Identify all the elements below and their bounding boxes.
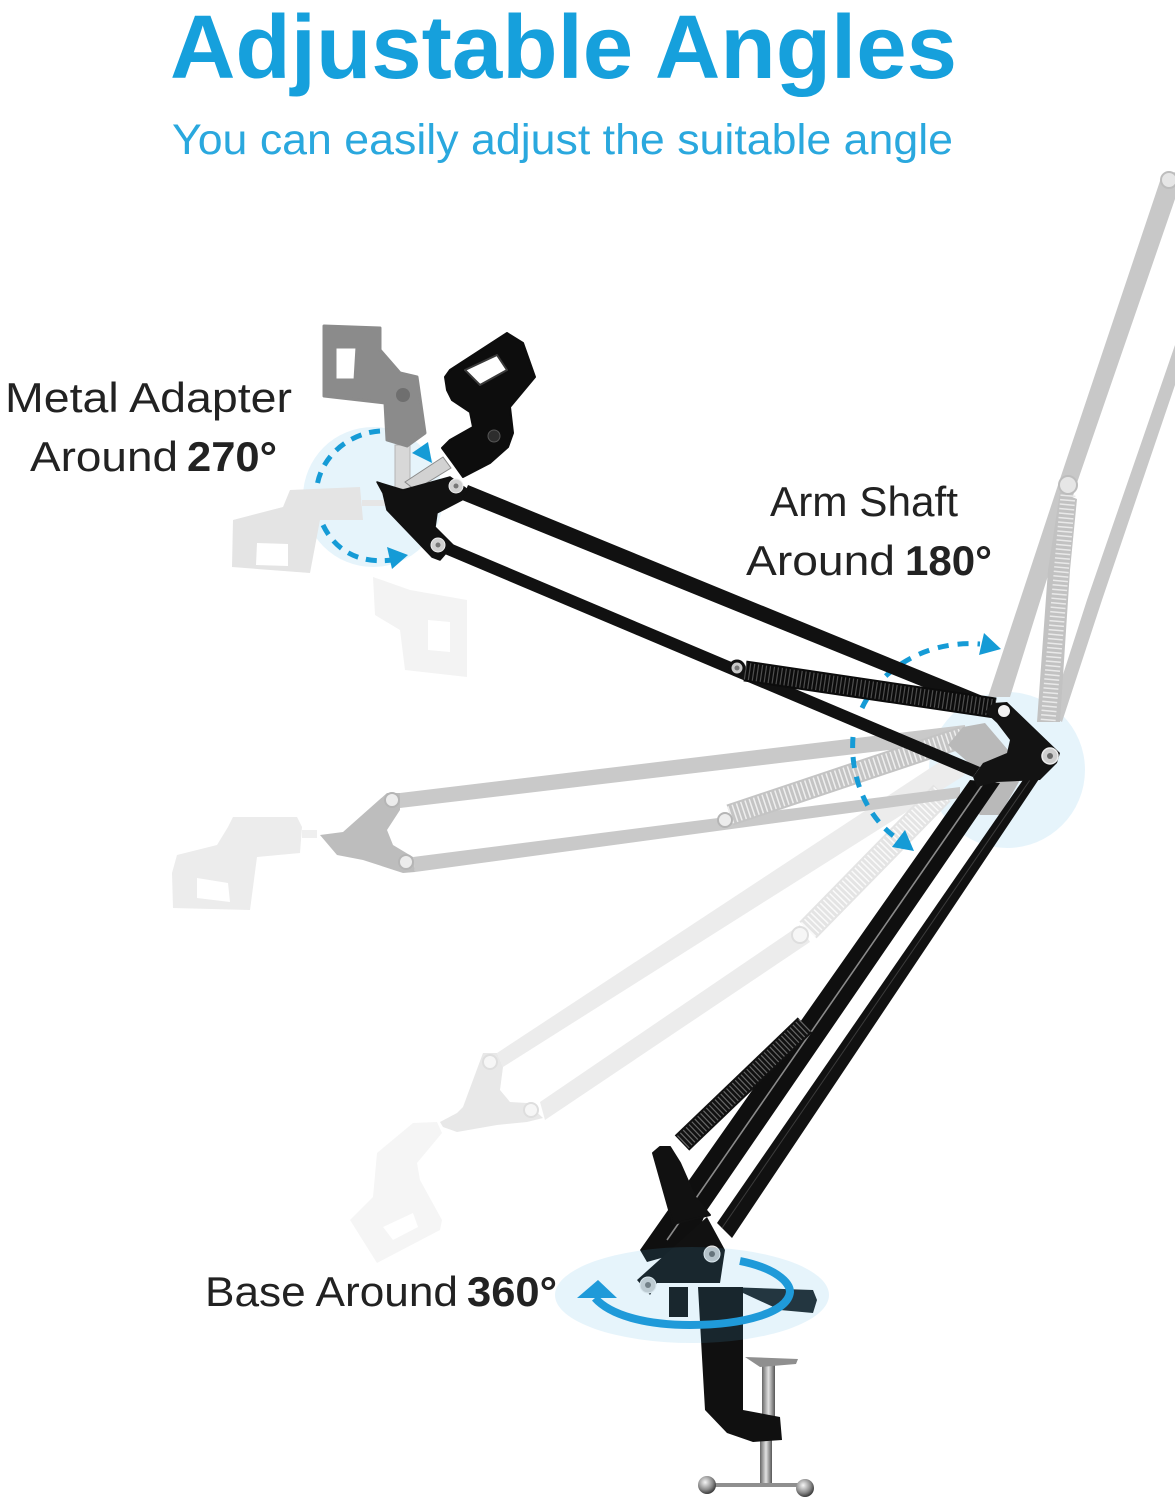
clamp screw disc: [745, 1357, 798, 1367]
boom arm: upper section: [440, 485, 1060, 787]
lower spring: [682, 1025, 805, 1143]
ghost mic clip: lower: [373, 577, 467, 677]
label: metal adapter: Around: [30, 433, 178, 480]
label: base: Base Around: [205, 1268, 458, 1315]
ghost mic clip: upright: [324, 326, 425, 489]
arrow: arm shaft dashed arc upper: [862, 633, 1001, 708]
highlight: base rotation zone: [555, 1247, 829, 1343]
ghost arm: lowest position: [350, 755, 965, 1263]
label: base: [205, 1268, 557, 1315]
clamp screw lower: [760, 1440, 772, 1487]
clamp screw upper: [762, 1363, 775, 1419]
pivot: base lower: [640, 1277, 656, 1293]
mic clip: black: [405, 333, 535, 490]
ghost mic clip: left: [232, 487, 386, 573]
label: metal adapter: [5, 374, 292, 480]
clamp plate: [727, 1287, 817, 1313]
highlight: arm shaft rotation zone: [929, 692, 1085, 848]
pivot: elbow bolt: [1042, 748, 1058, 764]
pivot: bracket lower: [431, 538, 445, 552]
ghost linkage behind elbow: [948, 723, 1020, 815]
pivot: spring anchor: [730, 661, 744, 675]
label: metal adapter: Metal Adapter: [5, 374, 292, 421]
pivot: elbow white: [997, 704, 1011, 718]
clamp small block: [669, 1287, 688, 1317]
boom arm: lower section: [640, 773, 1043, 1262]
arrow: base rotation: [577, 1261, 790, 1325]
base plate: [637, 1217, 725, 1295]
label: arm shaft: 180°: [905, 537, 992, 584]
spring bracket: [653, 1147, 710, 1224]
title: Adjustable Angles: [170, 0, 957, 98]
pivot: base upper: [704, 1246, 720, 1262]
arrow: arm shaft dashed arc lower: [853, 737, 914, 851]
arrow: adapter dashed arc upper: [317, 431, 432, 486]
clamp handle: [698, 1476, 814, 1497]
head bracket: [377, 477, 468, 560]
subtitle: You can easily adjust the suitable angle: [172, 116, 953, 164]
ghost arm: horizontal position: [172, 725, 965, 910]
elbow plate: [973, 702, 1060, 787]
label: arm shaft: Arm Shaft: [770, 478, 958, 525]
clamp body: [698, 1287, 782, 1442]
label: arm shaft: Around: [746, 537, 895, 584]
highlight: adapter rotation zone: [303, 427, 443, 567]
pivot: bracket upper: [449, 479, 463, 493]
label: metal adapter: 270°: [187, 433, 277, 480]
ghost arm: raised position: [988, 172, 1175, 722]
label: arm shaft: [746, 478, 992, 584]
arrow: adapter dashed arc lower: [323, 525, 408, 569]
desk clamp: [637, 1217, 817, 1497]
label: base: 360°: [467, 1268, 557, 1315]
upper spring: [745, 671, 995, 708]
